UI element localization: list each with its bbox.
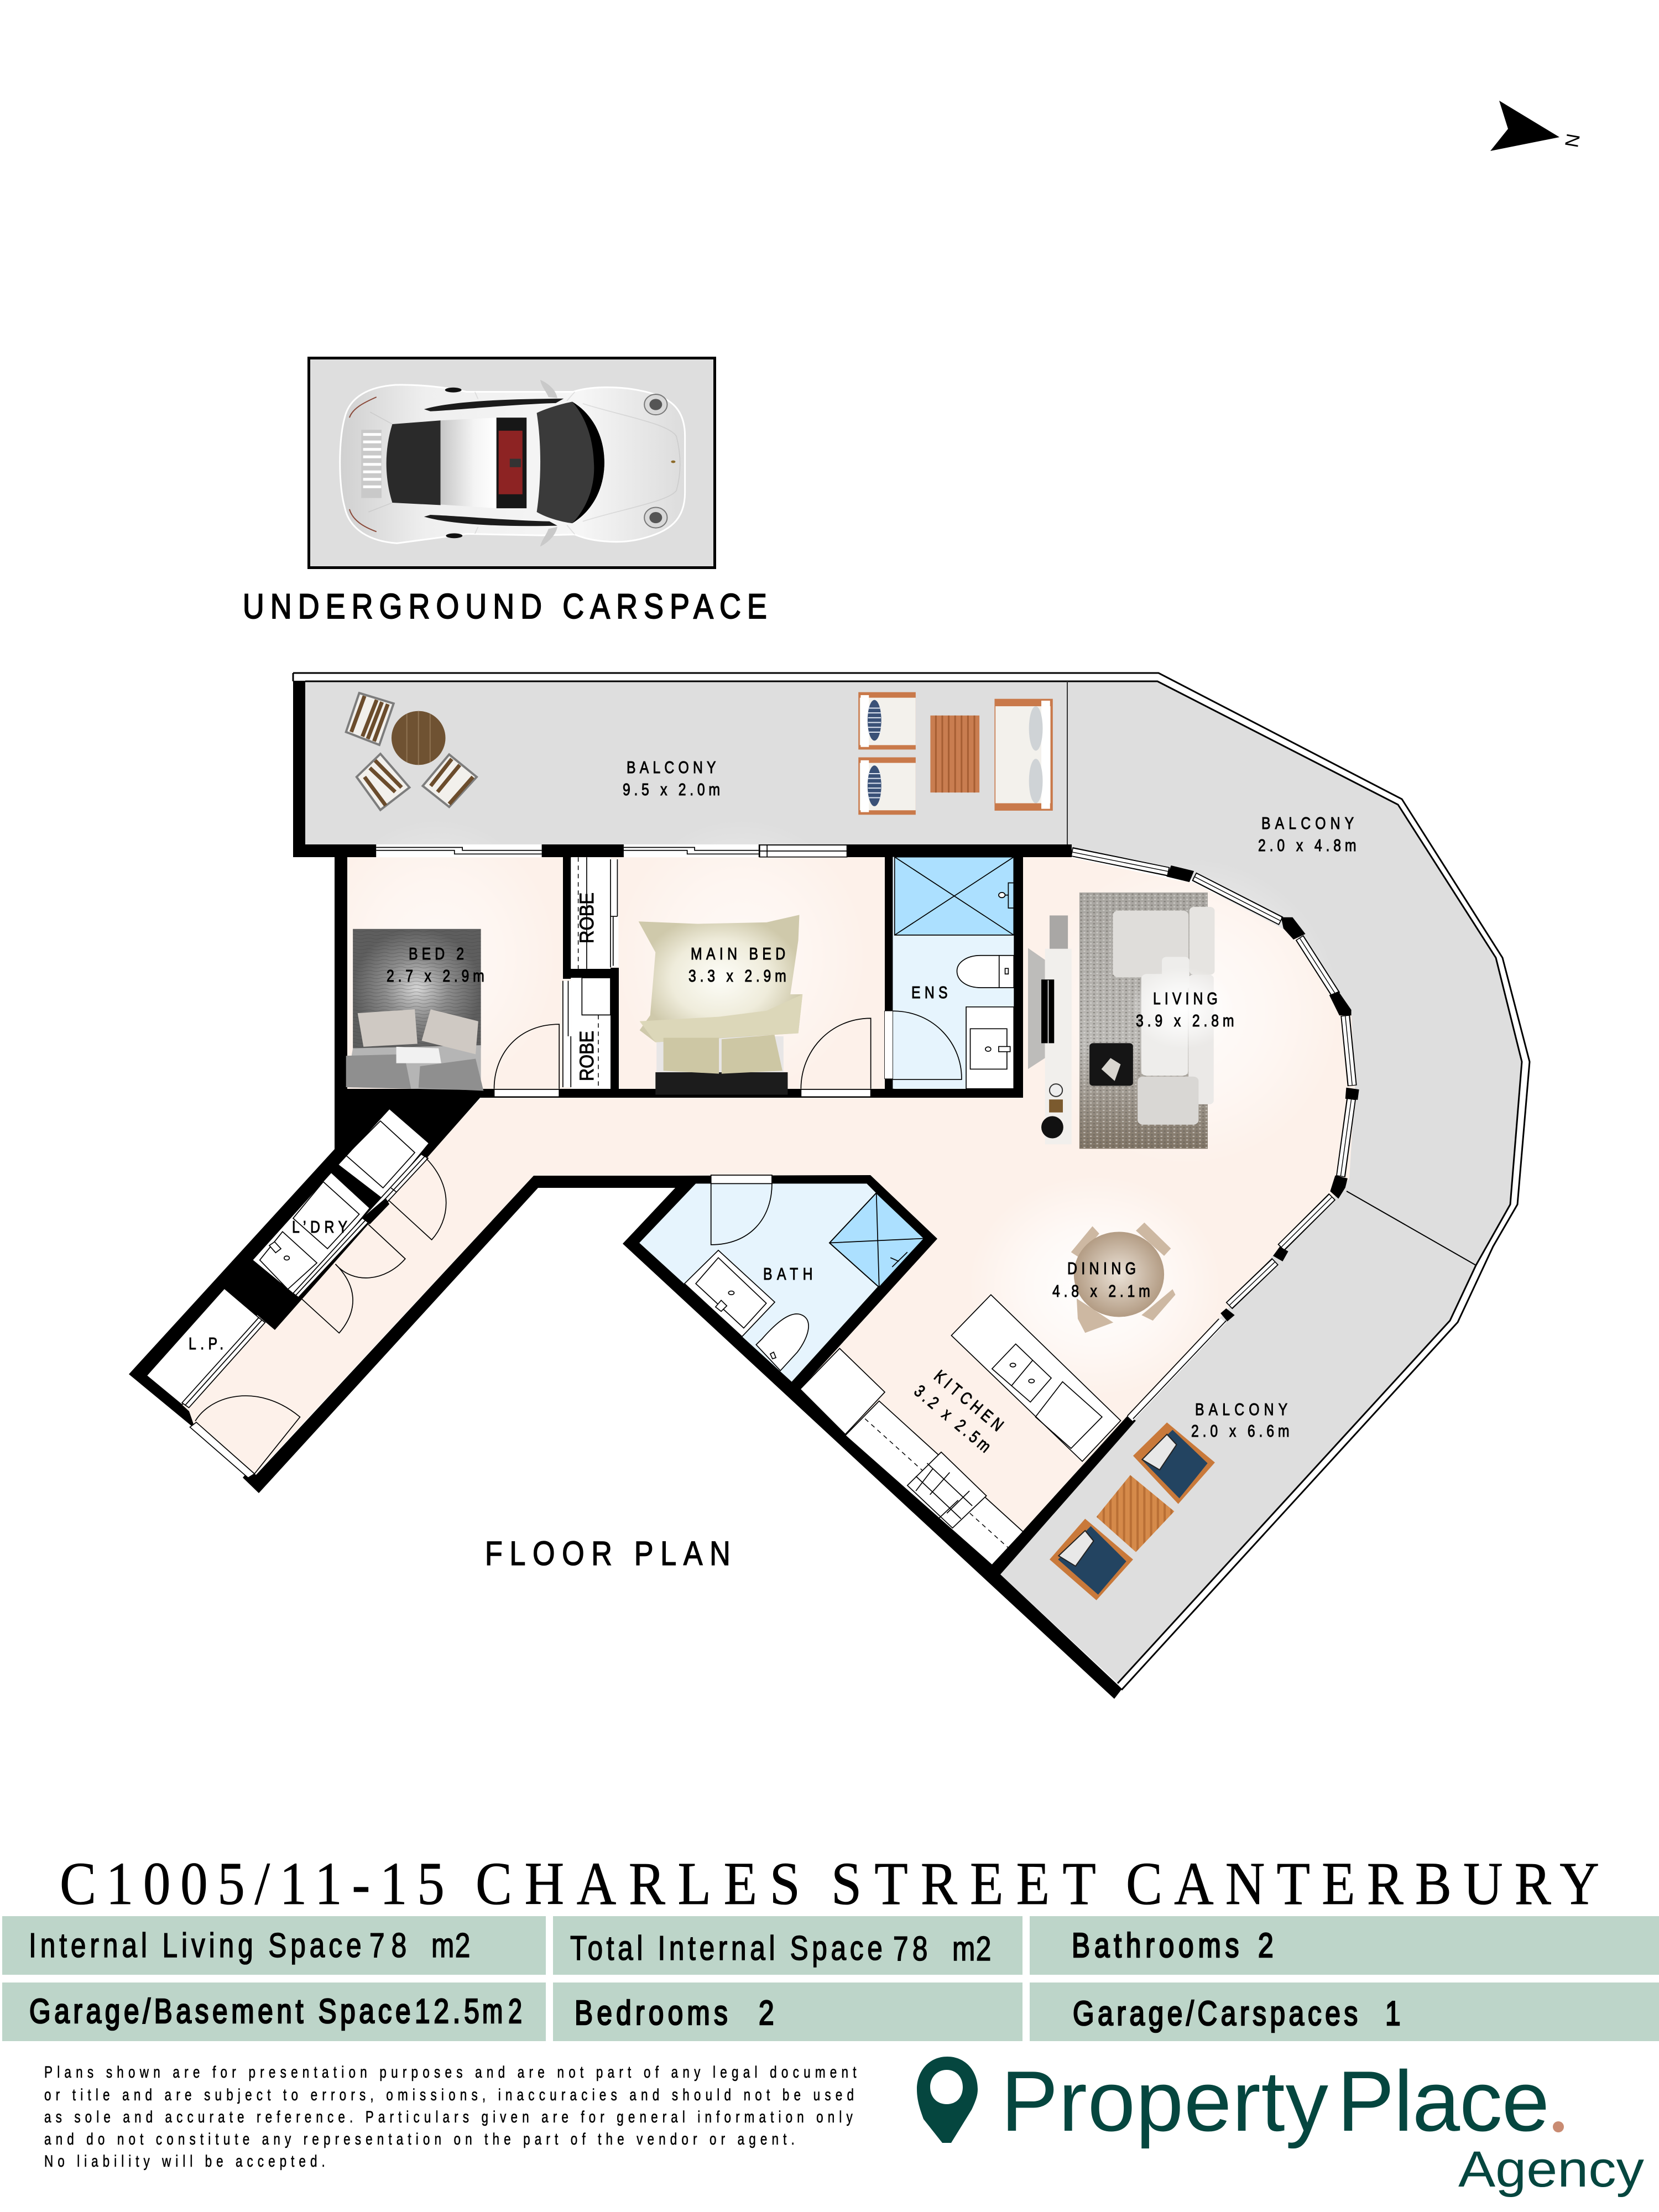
north arrow <box>1490 101 1584 151</box>
bathroom <box>639 1175 924 1382</box>
panel: underground carspace <box>309 358 714 567</box>
label: ensuite: ENS <box>911 983 948 1002</box>
disclaimer text: No liability will be accepted. <box>44 2152 325 2171</box>
disclaimer text: and do not constitute any representation on the part of the vendor or agent. <box>44 2130 795 2148</box>
stat: bathrooms: 2 <box>1258 1926 1274 1964</box>
logo: property place agency: Place <box>1337 2053 1550 2149</box>
top windows, robes and bedroom doors <box>376 844 871 1097</box>
label: bed 2: 2.7 x 2.9m <box>387 966 484 985</box>
disclaimer text: Plans shown are for presentation purposes and are not part of any legal document <box>44 2063 857 2081</box>
label: robes <box>576 893 598 1081</box>
stat: total internal space: Total Internal Space <box>570 1929 883 1967</box>
label: kitchen: 3.2 x 2.5m <box>911 1381 995 1456</box>
stat: garage basement space: Garage/Basement Space <box>29 1992 411 2030</box>
label: living: 3.9 x 2.8m <box>1136 1011 1234 1030</box>
label: balcony south <box>1191 1400 1290 1441</box>
title: property address: CANTERBURY <box>1126 1850 1599 1917</box>
logo: property place agency <box>917 2053 1644 2198</box>
label: main bed: 3.3 x 2.9m <box>688 966 786 985</box>
label: living <box>1136 989 1234 1030</box>
balcony balustrade <box>293 673 1530 1690</box>
walls <box>129 681 1136 1699</box>
label: balcony east: 2.0 x 4.8m <box>1258 836 1357 855</box>
floor plan drawing <box>129 673 1530 1699</box>
disclaimer text: or title and are subject to errors, omissions, inaccuracies and should not be used <box>44 2085 854 2104</box>
label: bed 2 <box>387 944 484 985</box>
balcony furniture: lounge set <box>858 692 1053 815</box>
facade windows upper <box>1072 852 1359 1199</box>
service block: laundry, linen and entry <box>147 1109 446 1478</box>
kitchen joinery <box>800 1295 1121 1565</box>
label: balcony south: BALCONY <box>1195 1400 1287 1419</box>
stat: bathrooms: Bathrooms <box>1072 1926 1239 1964</box>
interior floor <box>182 857 1355 1565</box>
label: balcony south: 2.0 x 6.6m <box>1191 1421 1290 1441</box>
label: living: LIVING <box>1153 989 1218 1008</box>
icon: map pin <box>917 2057 978 2143</box>
dining table and balcony lounge <box>1050 1223 1215 1600</box>
stat: garage carspaces: 1 <box>1385 1994 1401 2032</box>
label: balcony east <box>1258 813 1357 855</box>
label: balcony north <box>623 758 720 799</box>
label: balcony east: BALCONY <box>1261 813 1354 833</box>
stat: total internal space: 78 <box>893 1929 927 1968</box>
heading: floor plan: FLOOR PLAN <box>485 1535 731 1572</box>
label: balcony north: 9.5 x 2.0m <box>623 780 720 799</box>
room labels <box>189 758 1357 1456</box>
stat bars <box>2 1916 1659 2041</box>
label: dining: 4.8 x 2.1m <box>1052 1281 1150 1301</box>
disclaimer text <box>44 2063 857 2171</box>
stat: garage basement space: 12.5 <box>415 1992 479 2030</box>
facade windows lower <box>1128 1197 1332 1419</box>
label: bed 2: BED 2 <box>409 944 464 963</box>
stat: garage carspaces: Garage/Carspaces <box>1073 1994 1358 2032</box>
logo: property place agency: Property <box>1001 2053 1328 2149</box>
stat: bedrooms: 2 <box>759 1994 774 2032</box>
title: property address: CHARLES <box>476 1850 800 1917</box>
label: main bed <box>688 944 786 985</box>
title: property address: STREET <box>831 1850 1096 1917</box>
label: dining: DINING <box>1067 1259 1136 1278</box>
balcony furniture: round table and chairs <box>346 693 477 810</box>
stat: garage basement space: m2 <box>482 1992 522 2031</box>
car illustration <box>340 380 685 546</box>
label: kitchen: KITCHEN <box>931 1366 1007 1435</box>
disclaimer text: as sole and accurate reference. Particulars given are for general information only <box>44 2107 853 2126</box>
title: property address <box>60 1850 1599 1917</box>
balcony floor <box>305 681 1522 1683</box>
main bed <box>639 915 802 1095</box>
logo: property place agency: Agency <box>1458 2141 1644 2198</box>
label: robes: ROBE <box>576 893 598 943</box>
label: dining <box>1052 1259 1150 1301</box>
stat: internal living space: Internal Living Space <box>29 1926 362 1964</box>
stat: internal living space: 78 <box>369 1926 406 1964</box>
room glows <box>315 818 1341 1396</box>
label: robes: ROBE <box>576 1031 598 1081</box>
label: linen press: L.P. <box>189 1334 223 1353</box>
panel: property statistics <box>2 1916 1659 2041</box>
label: bath: BATH <box>763 1264 813 1284</box>
living furniture <box>1028 893 1235 1149</box>
bed 2 <box>346 929 483 1091</box>
heading: underground carspace: UNDERGROUND CARSPACE <box>243 587 767 626</box>
title: property address: C1005/11-15 <box>60 1850 445 1917</box>
shower and ensuite <box>884 857 1014 1089</box>
label: laundry: L’DRY <box>292 1217 347 1237</box>
stat: bedrooms: Bedrooms <box>575 1994 728 2032</box>
label: balcony north: BALCONY <box>627 758 716 777</box>
stat: internal living space: m2 <box>431 1926 470 1964</box>
label: main bed: MAIN BED <box>691 944 785 963</box>
stat: total internal space: m2 <box>952 1929 991 1968</box>
north arrow: N <box>1561 132 1584 149</box>
